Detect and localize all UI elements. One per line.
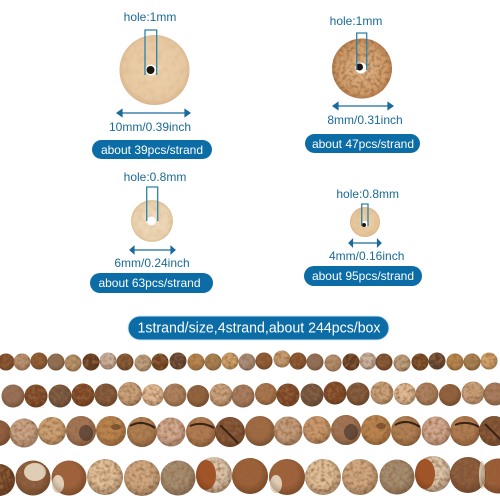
hole bracket [145, 30, 157, 75]
label: size: 8mm/0.31inch [327, 113, 403, 127]
strand: 10mm beads [0, 456, 500, 496]
pill: pieces per strand: about 47pcs/strand [312, 137, 414, 151]
pill: pieces per strand: about 95pcs/strand [312, 269, 414, 283]
label: hole 1mm: hole:1mm [124, 10, 176, 24]
bead specimen: 10mm [92, 10, 212, 159]
label: size: 10mm/0.39inch [109, 120, 191, 134]
bead specimen: 6mm [90, 170, 213, 293]
label: hole 1mm: hole:1mm [330, 14, 382, 28]
label: size: 4mm/0.16inch [329, 249, 404, 263]
bead specimen: 4mm [304, 187, 422, 286]
pill: pieces per strand: about 39pcs/strand [101, 143, 203, 157]
icon: 10mm bead [120, 35, 190, 105]
size arrow [349, 240, 381, 246]
size arrow [117, 110, 190, 116]
icon: 6mm bead [131, 200, 173, 242]
strand: 4mm beads [0, 350, 498, 372]
size arrow [130, 246, 175, 254]
icon: 4mm bead [350, 207, 380, 237]
hole bracket [357, 33, 367, 70]
size arrow [333, 102, 393, 110]
icon: 8mm bead [332, 38, 392, 98]
strand: 6mm beads [2, 382, 500, 408]
banner: strands per box: 1strand/size,4strand,about 244pcs/box [138, 320, 381, 336]
label: hole 0.8mm: hole:0.8mm [124, 170, 186, 184]
bead specimen: 8mm [305, 14, 420, 153]
pill: pieces per strand [92, 140, 212, 159]
label: hole 0.8mm: hole:0.8mm [336, 187, 399, 201]
hole bracket [362, 204, 368, 226]
strand: 8mm beads [0, 415, 500, 448]
label: size: 6mm/0.24inch [114, 256, 190, 270]
pill: pieces per strand: about 63pcs/strand [98, 276, 201, 290]
banner: strands per box [128, 316, 389, 340]
hole bracket [147, 187, 158, 221]
